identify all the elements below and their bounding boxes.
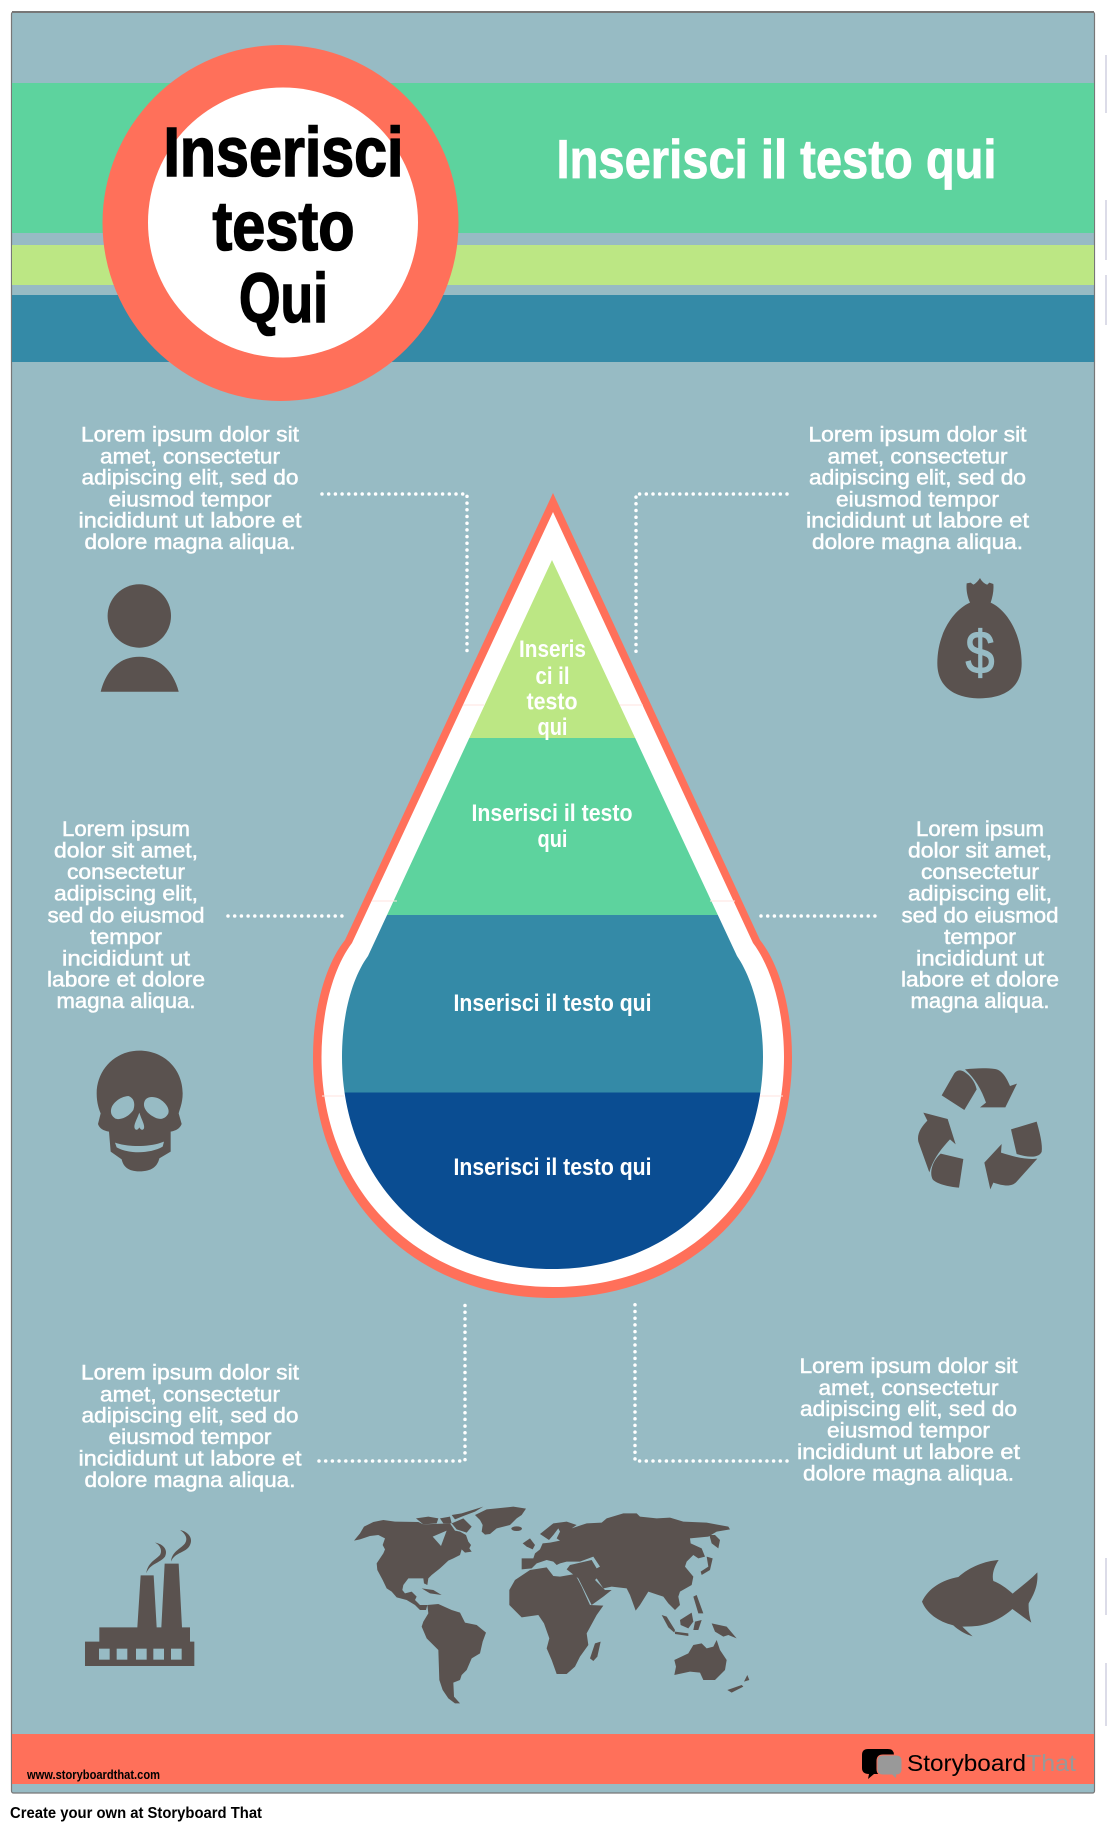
- text block: bottom right: eiusmod tempor: [827, 1420, 990, 1443]
- text block: bottom left: amet, consectetur: [100, 1383, 280, 1406]
- text block: middle left: [47, 818, 205, 1013]
- title badge: [102, 45, 458, 401]
- drop: coral outline: [313, 493, 792, 1298]
- layer label: lime: testo: [526, 688, 578, 716]
- text block: top right: amet, consectetur: [828, 446, 1008, 468]
- text block: middle right: [901, 818, 1059, 1013]
- banner: green stripe: [12, 83, 1094, 233]
- text block: middle right: sed do eiusmod: [902, 904, 1058, 927]
- text block: top right: eiusmod tempor: [836, 488, 999, 511]
- layer label: green: [472, 800, 632, 853]
- logo: wordmark: That: [1026, 1750, 1077, 1776]
- text block: top right: Lorem ipsum dolor sit: [808, 424, 1027, 447]
- title: testo: [212, 187, 354, 265]
- text block: bottom left: dolore magna aliqua.: [84, 1469, 296, 1492]
- text block: top left: dolore magna aliqua.: [84, 531, 296, 554]
- connector: bottom left: [319, 1305, 465, 1461]
- text block: middle right: labore et dolore: [901, 968, 1059, 992]
- text block: bottom right: incididunt ut labore et: [797, 1441, 1020, 1464]
- icon: skull: [97, 1051, 183, 1171]
- text block: top right: [806, 424, 1029, 554]
- text block: bottom right: dolore magna aliqua.: [803, 1462, 1014, 1485]
- banner: lime stripe: [12, 245, 1094, 285]
- icon: person: [101, 584, 179, 692]
- text block: bottom left: Lorem ipsum dolor sit: [81, 1362, 299, 1384]
- text block: middle right: tempor: [944, 926, 1016, 949]
- text block: bottom left: eiusmod tempor: [108, 1426, 272, 1449]
- text block: top right: incididunt ut labore et: [806, 510, 1029, 533]
- connector: bottom right: [635, 1303, 787, 1461]
- text block: middle right: magna aliqua.: [910, 990, 1050, 1013]
- text block: top left: amet, consectetur: [100, 446, 280, 468]
- text block: middle left: labore et dolore: [47, 968, 205, 992]
- logo: wordmark: [907, 1750, 1077, 1776]
- layer label: lime: Inseris: [519, 636, 586, 663]
- logo: speech bubbles: [862, 1749, 902, 1779]
- text block: middle right: adipiscing elit,: [908, 883, 1052, 906]
- text block: top left: Lorem ipsum dolor sit: [81, 424, 299, 447]
- text block: middle left: Lorem ipsum: [62, 818, 190, 841]
- footer band: [12, 1734, 1094, 1784]
- text block: top right: adipiscing elit, sed do: [809, 466, 1026, 490]
- text block: middle left: sed do eiusmod: [48, 904, 205, 927]
- icon: world map: [354, 1507, 749, 1703]
- title: [164, 113, 404, 337]
- connector: top left: [322, 494, 467, 653]
- connector: middle left: [228, 914, 348, 918]
- logo: wordmark: Storyboard: [907, 1750, 1026, 1776]
- subtitle: Inserisci il testo qui: [556, 128, 996, 190]
- text block: top left: eiusmod tempor: [108, 488, 272, 511]
- text block: bottom right: Lorem ipsum dolor sit: [800, 1355, 1018, 1378]
- text block: bottom right: amet, consectetur: [818, 1377, 998, 1400]
- text block: bottom right: [797, 1355, 1020, 1485]
- text block: middle left: magna aliqua.: [56, 990, 196, 1013]
- text block: top left: adipiscing elit, sed do: [82, 466, 298, 490]
- icon: money bag: [937, 578, 1022, 698]
- text block: middle left: dolor sit amet,: [54, 840, 198, 863]
- layer label: navy: Inserisci il testo qui: [454, 1154, 652, 1181]
- icon: money bag: $: [966, 619, 994, 686]
- text block: bottom right: adipiscing elit, sed do: [800, 1398, 1017, 1421]
- layer label: blue: Inserisci il testo qui: [454, 990, 652, 1017]
- text block: bottom left: adipiscing elit, sed do: [82, 1404, 298, 1427]
- text block: middle left: tempor: [90, 926, 162, 949]
- layer label: green: qui: [538, 826, 568, 853]
- text block: bottom left: incididunt ut labore et: [78, 1448, 302, 1470]
- text block: middle right: dolor sit amet,: [908, 840, 1052, 863]
- drop: white border: [322, 512, 784, 1287]
- icon: fish: [922, 1560, 1037, 1636]
- layer label: lime: ci il: [536, 663, 570, 690]
- drop: coloured layers: [330, 550, 780, 1272]
- text block: middle left: adipiscing elit,: [54, 883, 198, 906]
- text block: middle right: Lorem ipsum: [916, 818, 1044, 841]
- title: Inserisci: [164, 113, 404, 191]
- connector: middle right: [761, 914, 881, 918]
- icon: recycle: [918, 1068, 1042, 1189]
- text block: middle right: incididunt ut: [916, 947, 1044, 970]
- icon: factory: [85, 1530, 194, 1666]
- text block: middle left: incididunt ut: [62, 947, 190, 970]
- layer label: lime: qui: [538, 714, 568, 741]
- layer label: green: Inserisci il testo: [472, 800, 632, 827]
- text block: bottom left: [78, 1362, 302, 1492]
- layer label: lime: [519, 636, 586, 741]
- footer url: www.storyboardthat.com: [26, 1767, 160, 1782]
- text block: top left: [78, 424, 302, 554]
- text block: top right: dolore magna aliqua.: [812, 531, 1023, 554]
- text block: top left: incididunt ut labore et: [78, 510, 302, 533]
- water drop diagram: [313, 493, 792, 1298]
- connector: top right: [636, 494, 787, 653]
- title: Qui: [239, 259, 328, 337]
- caption: Create your own at Storyboard That: [10, 1805, 263, 1822]
- text block: middle right: consectetur: [921, 861, 1039, 884]
- banner: blue stripe: [12, 295, 1094, 362]
- text block: middle left: consectetur: [67, 861, 185, 884]
